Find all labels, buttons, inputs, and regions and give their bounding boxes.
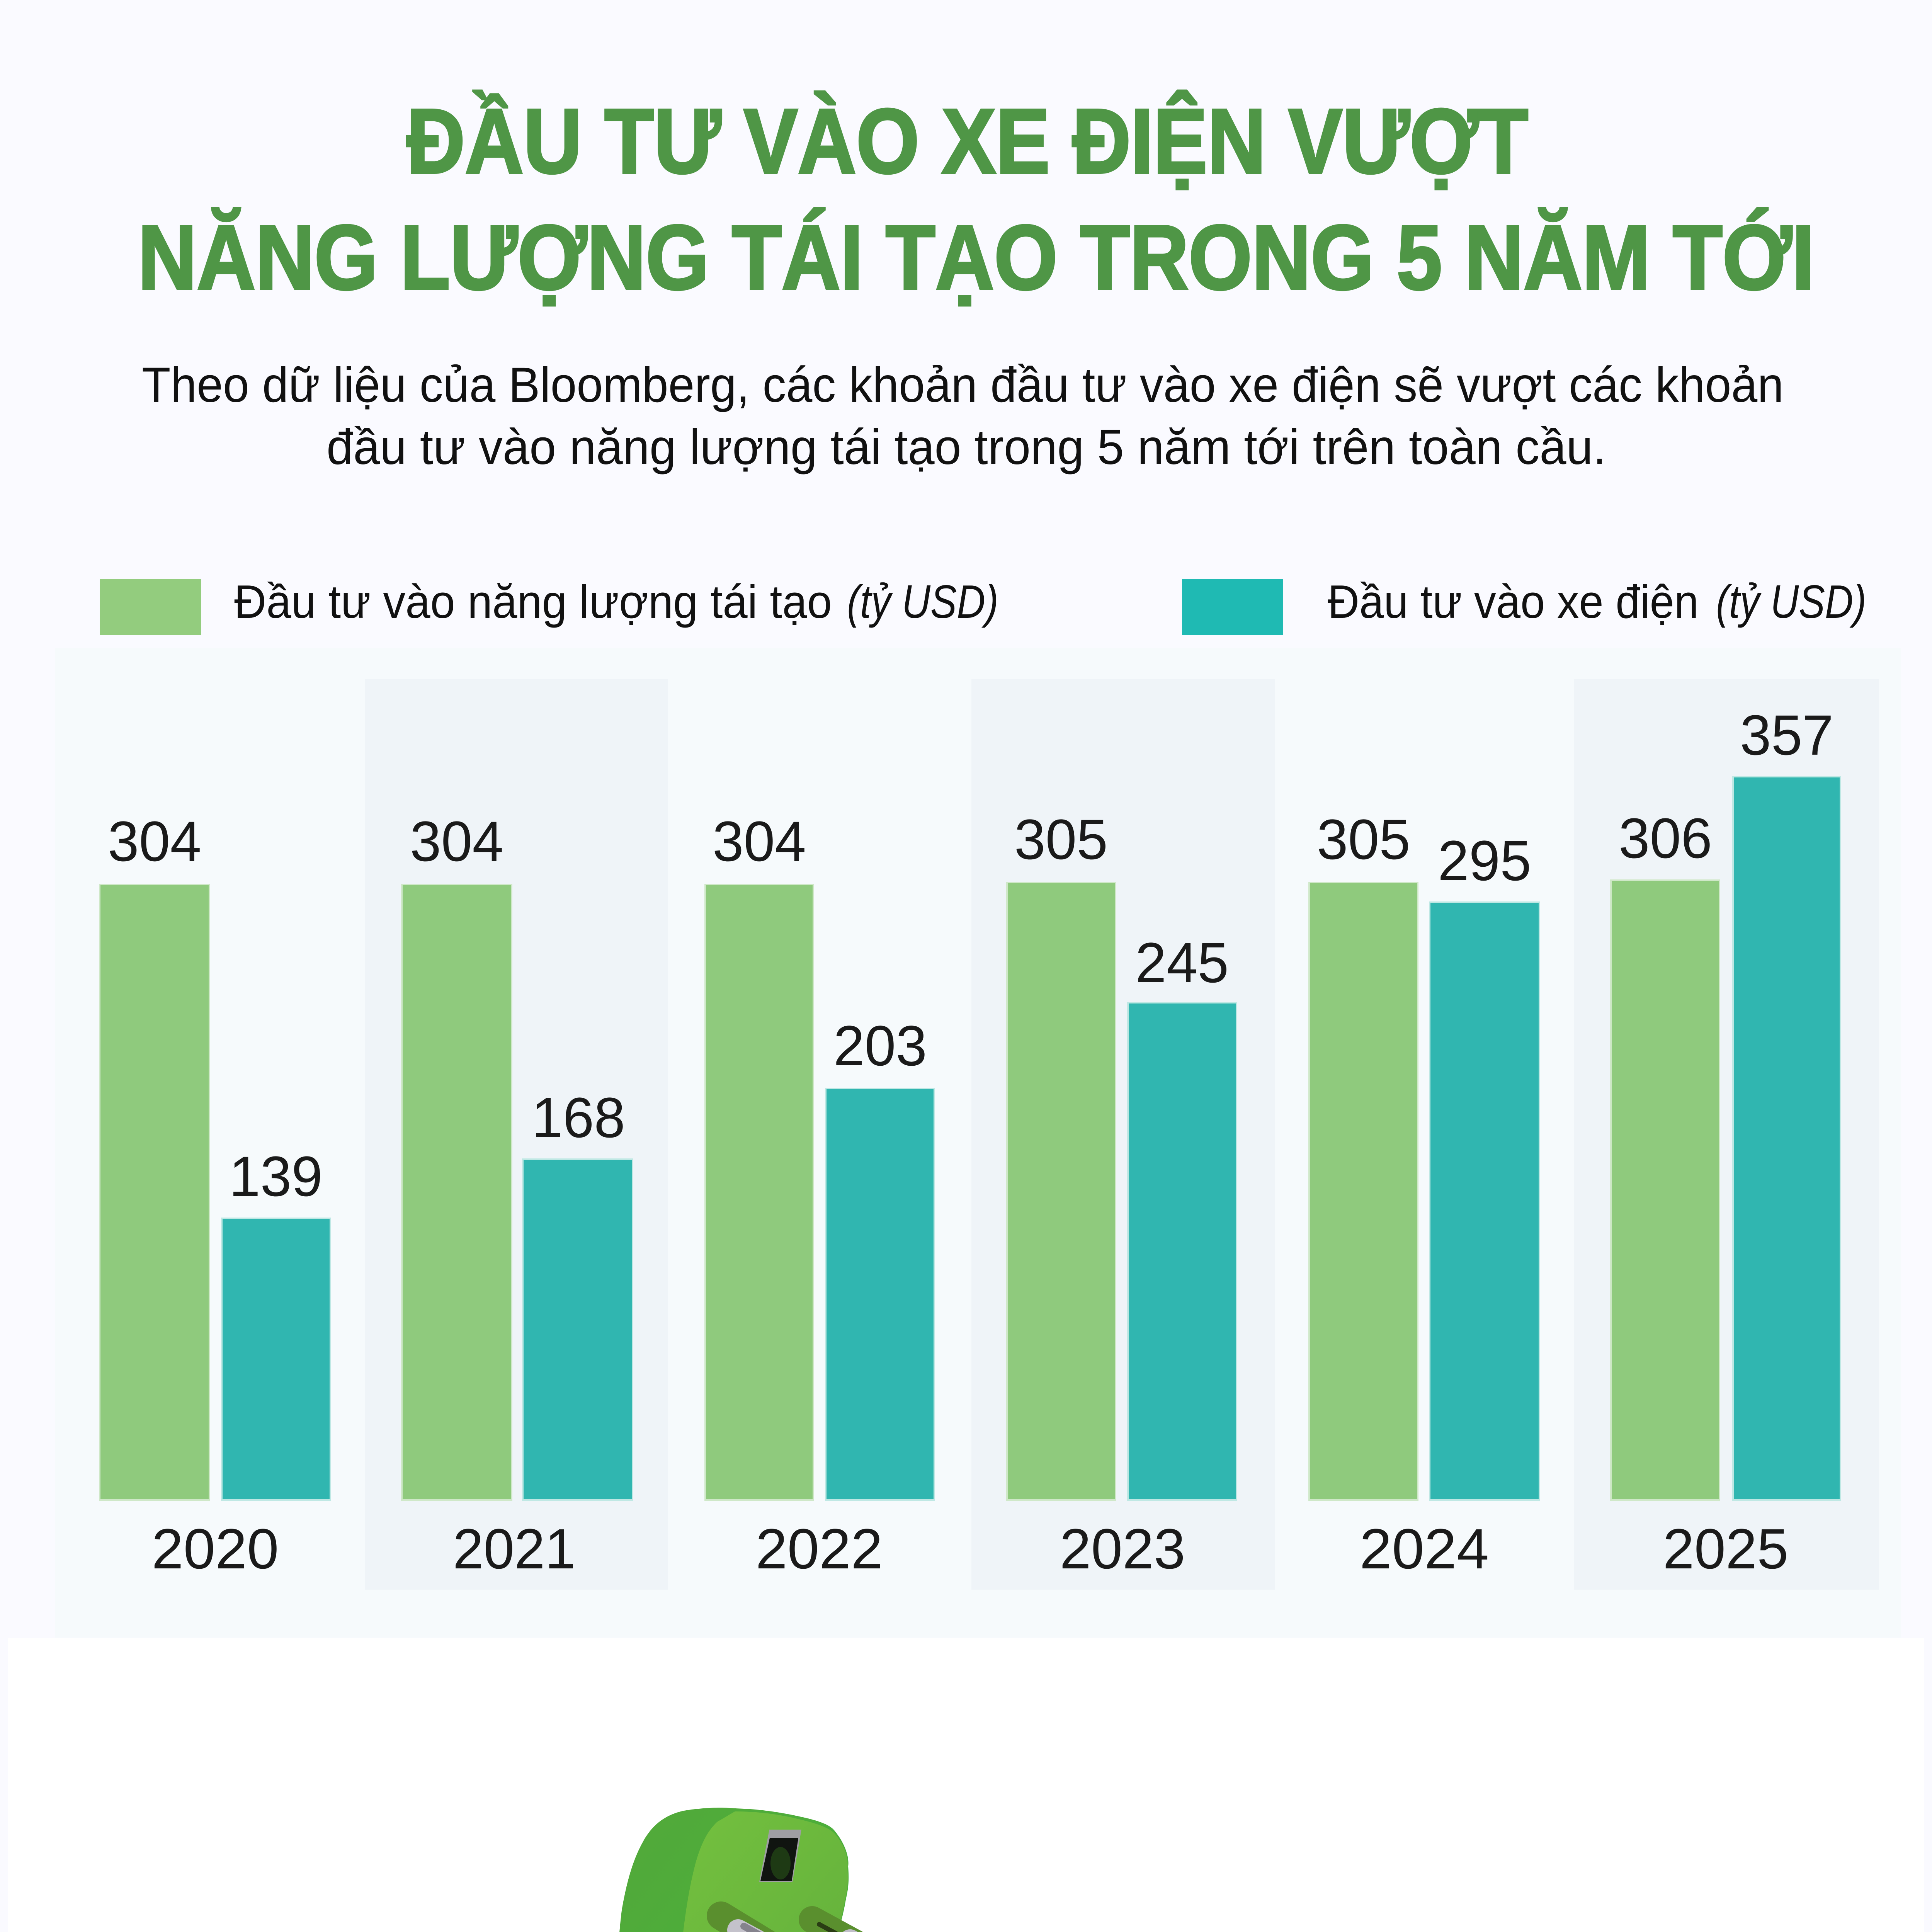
title: ĐẦU TƯ VÀO XE ĐIỆN VƯỢT — [406, 90, 1528, 192]
bar chart panel — [55, 648, 1901, 1638]
year 2022: 2022 — [756, 1517, 883, 1581]
year 2022: 304 — [713, 810, 806, 873]
year 2024: 2024 — [1359, 1517, 1489, 1581]
year 2025: 357 — [1740, 704, 1833, 767]
white lower area — [0, 1638, 1932, 1932]
plug pin right — [812, 1920, 882, 1932]
intro text: đầu tư vào năng lượng tái tạo trong 5 năm tới trên toàn cầu. — [327, 420, 1606, 475]
legend: (tỷ USD) — [847, 575, 998, 628]
year 2020: 2020 — [151, 1517, 279, 1581]
year 2021: 304 — [410, 810, 503, 873]
year 2023: 305 — [1014, 808, 1108, 871]
year 2022: 203 — [833, 1014, 927, 1078]
intro text: Theo dữ liệu của Bloomberg, các khoản đầu tư vào xe điện sẽ vượt các khoản — [142, 357, 1784, 413]
year 2023: 245 — [1135, 931, 1229, 995]
legend: Đầu tư vào năng lượng tái tạo — [234, 575, 832, 628]
legend: Đầu tư vào xe điện — [1328, 575, 1699, 628]
year 2021: 168 — [532, 1086, 625, 1150]
plug socket hole — [760, 1838, 798, 1881]
year 2021 — [402, 810, 633, 1581]
year 2024 — [1309, 808, 1539, 1581]
year 2022 — [705, 810, 934, 1581]
year 2025: 2025 — [1663, 1517, 1788, 1581]
year 2020 — [100, 810, 330, 1581]
year 2021: 2021 — [453, 1517, 576, 1581]
plug socket slot — [759, 1830, 801, 1882]
intro text — [142, 357, 1784, 475]
year 2025: 306 — [1619, 807, 1712, 870]
plug socket inner — [770, 1847, 791, 1879]
year 2020: 139 — [229, 1145, 323, 1208]
year 2020: 304 — [108, 810, 201, 873]
title — [138, 90, 1815, 309]
year 2025 — [1611, 704, 1840, 1581]
plug front face — [679, 1811, 848, 1932]
legend — [100, 575, 1866, 635]
year 2024: 295 — [1438, 829, 1531, 893]
year 2023 — [1007, 808, 1236, 1581]
illustration: power plug — [603, 1808, 882, 1932]
year 2024: 305 — [1317, 808, 1410, 871]
legend: (tỷ USD) — [1716, 575, 1866, 628]
year 2023: 2023 — [1060, 1517, 1185, 1581]
plug pin left — [721, 1916, 792, 1932]
